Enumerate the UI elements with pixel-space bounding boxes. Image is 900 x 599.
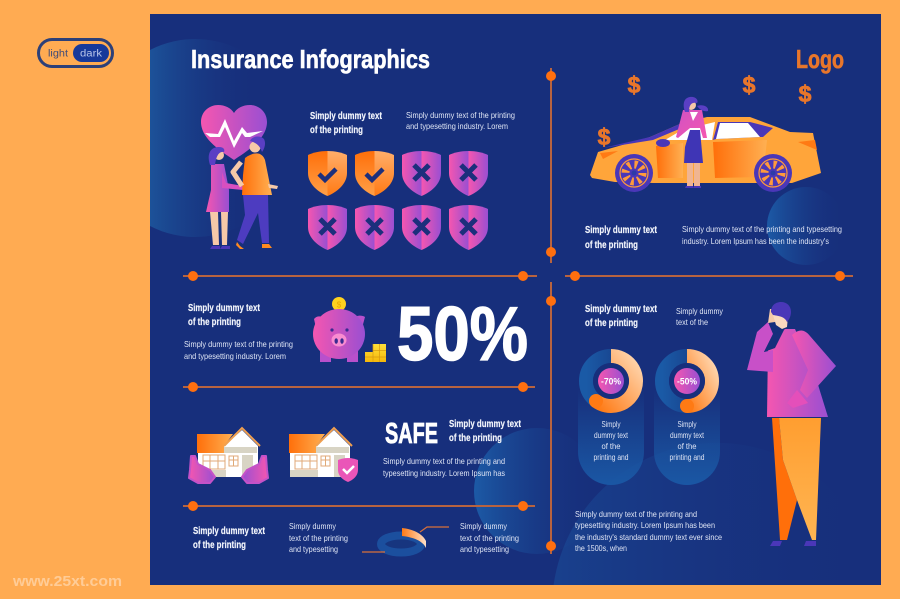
watermark: www.25xt.com bbox=[12, 573, 122, 590]
icon: shield cross bbox=[308, 205, 347, 250]
text: car description bbox=[682, 225, 842, 246]
text: bottom column two: Simply dummy bbox=[460, 522, 508, 531]
text: car description: Simply dummy text of the printing and typesetting bbox=[682, 225, 842, 234]
text: bottom column one bbox=[289, 522, 348, 554]
heading: safe: Simply dummy text bbox=[449, 418, 521, 430]
text: donuts description: Simply dummy bbox=[676, 307, 724, 316]
icon: shield cross bbox=[402, 205, 441, 250]
chart: donut 50 percent: printing and bbox=[670, 453, 705, 462]
text: bottom right paragraph: the 1500s, when bbox=[575, 544, 627, 553]
icons: dollar signs: $ bbox=[743, 72, 756, 98]
heading: bottom left: Simply dummy text bbox=[193, 525, 265, 537]
icons: dollar signs: $ bbox=[628, 72, 641, 98]
text: safe description: Simply dummy text of the printing and bbox=[383, 457, 505, 466]
text: bottom column two: and typesetting bbox=[460, 545, 509, 554]
label: SAFE: SAFE bbox=[385, 418, 438, 450]
text: bottom column one: Simply dummy bbox=[289, 522, 337, 531]
text: donuts description bbox=[676, 307, 724, 327]
heading: donuts: of the printing bbox=[585, 317, 638, 329]
chart: donut 50 percent: -50% bbox=[677, 376, 697, 386]
text: bottom right paragraph: Simply dummy text of the printing and bbox=[575, 510, 697, 519]
text: bottom right paragraph: the industry's standard dummy text ever since bbox=[575, 533, 722, 542]
text: donuts description: text of the bbox=[676, 318, 708, 327]
icon: shield cross bbox=[449, 151, 488, 196]
heading: shields: Simply dummy text bbox=[310, 110, 382, 122]
heading: car: of the printing bbox=[585, 239, 638, 251]
illustration: car and woman bbox=[590, 97, 821, 192]
chart: 3D ring bbox=[362, 527, 449, 552]
icon: coin stack bbox=[365, 344, 386, 362]
icon: shield check bbox=[355, 151, 394, 196]
icon: piggy bank bbox=[313, 297, 365, 362]
text: bottom right paragraph bbox=[575, 510, 722, 553]
heading: shields: of the printing bbox=[310, 124, 363, 136]
heading: bottom left: of the printing bbox=[193, 539, 246, 551]
icon: shield cross bbox=[402, 151, 441, 196]
text: bottom column two bbox=[460, 522, 519, 554]
illustration: couple with heart bbox=[201, 105, 278, 249]
icon: shield cross bbox=[449, 205, 488, 250]
toggle: light dark bbox=[38, 40, 112, 66]
text: shields description bbox=[406, 111, 515, 131]
heading: donuts: Simply dummy text bbox=[585, 303, 657, 315]
icon: shield cross bbox=[355, 205, 394, 250]
heading: donuts bbox=[585, 303, 657, 329]
heading: car bbox=[585, 224, 657, 251]
icons: dollar signs bbox=[598, 72, 812, 150]
icon: house with shield bbox=[289, 428, 358, 482]
chart: donut 50 percent: of the bbox=[678, 442, 697, 451]
heading: safe: of the printing bbox=[449, 432, 502, 444]
text: savings description bbox=[184, 340, 293, 361]
text: bottom column one: text of the printing bbox=[289, 534, 348, 543]
logo: Logo bbox=[796, 44, 844, 74]
heading: car: Simply dummy text bbox=[585, 224, 657, 236]
text: safe description bbox=[383, 457, 505, 478]
chart: donut 70 percent: printing and bbox=[594, 453, 629, 462]
chart: donut 50 percent: dummy text bbox=[670, 431, 705, 440]
illustration: thinking person bbox=[747, 302, 836, 546]
stat: 50%: 50% bbox=[397, 292, 528, 377]
heading: shields bbox=[310, 110, 382, 136]
icons: dollar signs: $ bbox=[799, 81, 812, 107]
panel: dark background bbox=[150, 14, 881, 585]
text: shields description: Simply dummy text of the printing bbox=[406, 111, 515, 120]
chart: donut 70 percent: of the bbox=[602, 442, 621, 451]
chart: donut 70 percent: Simply bbox=[602, 420, 621, 429]
chart: donut 50 percent: Simply bbox=[678, 420, 697, 429]
heading: safe bbox=[449, 418, 521, 444]
chart: donut 70 percent: -70% bbox=[601, 376, 621, 386]
text: bottom right paragraph: typesetting industry. Lorem Ipsum has been bbox=[575, 521, 715, 530]
text: savings description: and typesetting industry. Lorem bbox=[184, 352, 286, 361]
title: Insurance Infographics bbox=[191, 44, 430, 74]
dividers bbox=[183, 68, 853, 554]
icons: dollar signs: $ bbox=[598, 124, 611, 150]
chart: donut 70 percent: dummy text bbox=[594, 431, 629, 440]
chart: donut 70 percent bbox=[578, 348, 644, 485]
text: bottom column one: and typesetting bbox=[289, 545, 338, 554]
toggle: light dark: dark bbox=[80, 48, 103, 60]
icon: shield check bbox=[308, 151, 347, 196]
icon: house in hands bbox=[189, 428, 268, 483]
heading: savings: Simply dummy text bbox=[188, 302, 260, 314]
text: safe description: typesetting industry. Lorem Ipsum has bbox=[383, 469, 505, 478]
toggle: light dark: light bbox=[48, 48, 68, 60]
heading: savings: of the printing bbox=[188, 316, 241, 328]
text: car description: industry. Lorem Ipsum has been the industry's bbox=[682, 237, 829, 246]
heading: bottom left bbox=[193, 525, 265, 551]
text: shields description: and typesetting industry. Lorem bbox=[406, 122, 508, 131]
heading: savings bbox=[188, 302, 260, 328]
text: savings description: Simply dummy text of the printing bbox=[184, 340, 293, 349]
icon: piggy bank: $ bbox=[337, 300, 342, 310]
text: bottom column two: text of the printing bbox=[460, 534, 519, 543]
chart: donut 50 percent bbox=[654, 348, 720, 485]
